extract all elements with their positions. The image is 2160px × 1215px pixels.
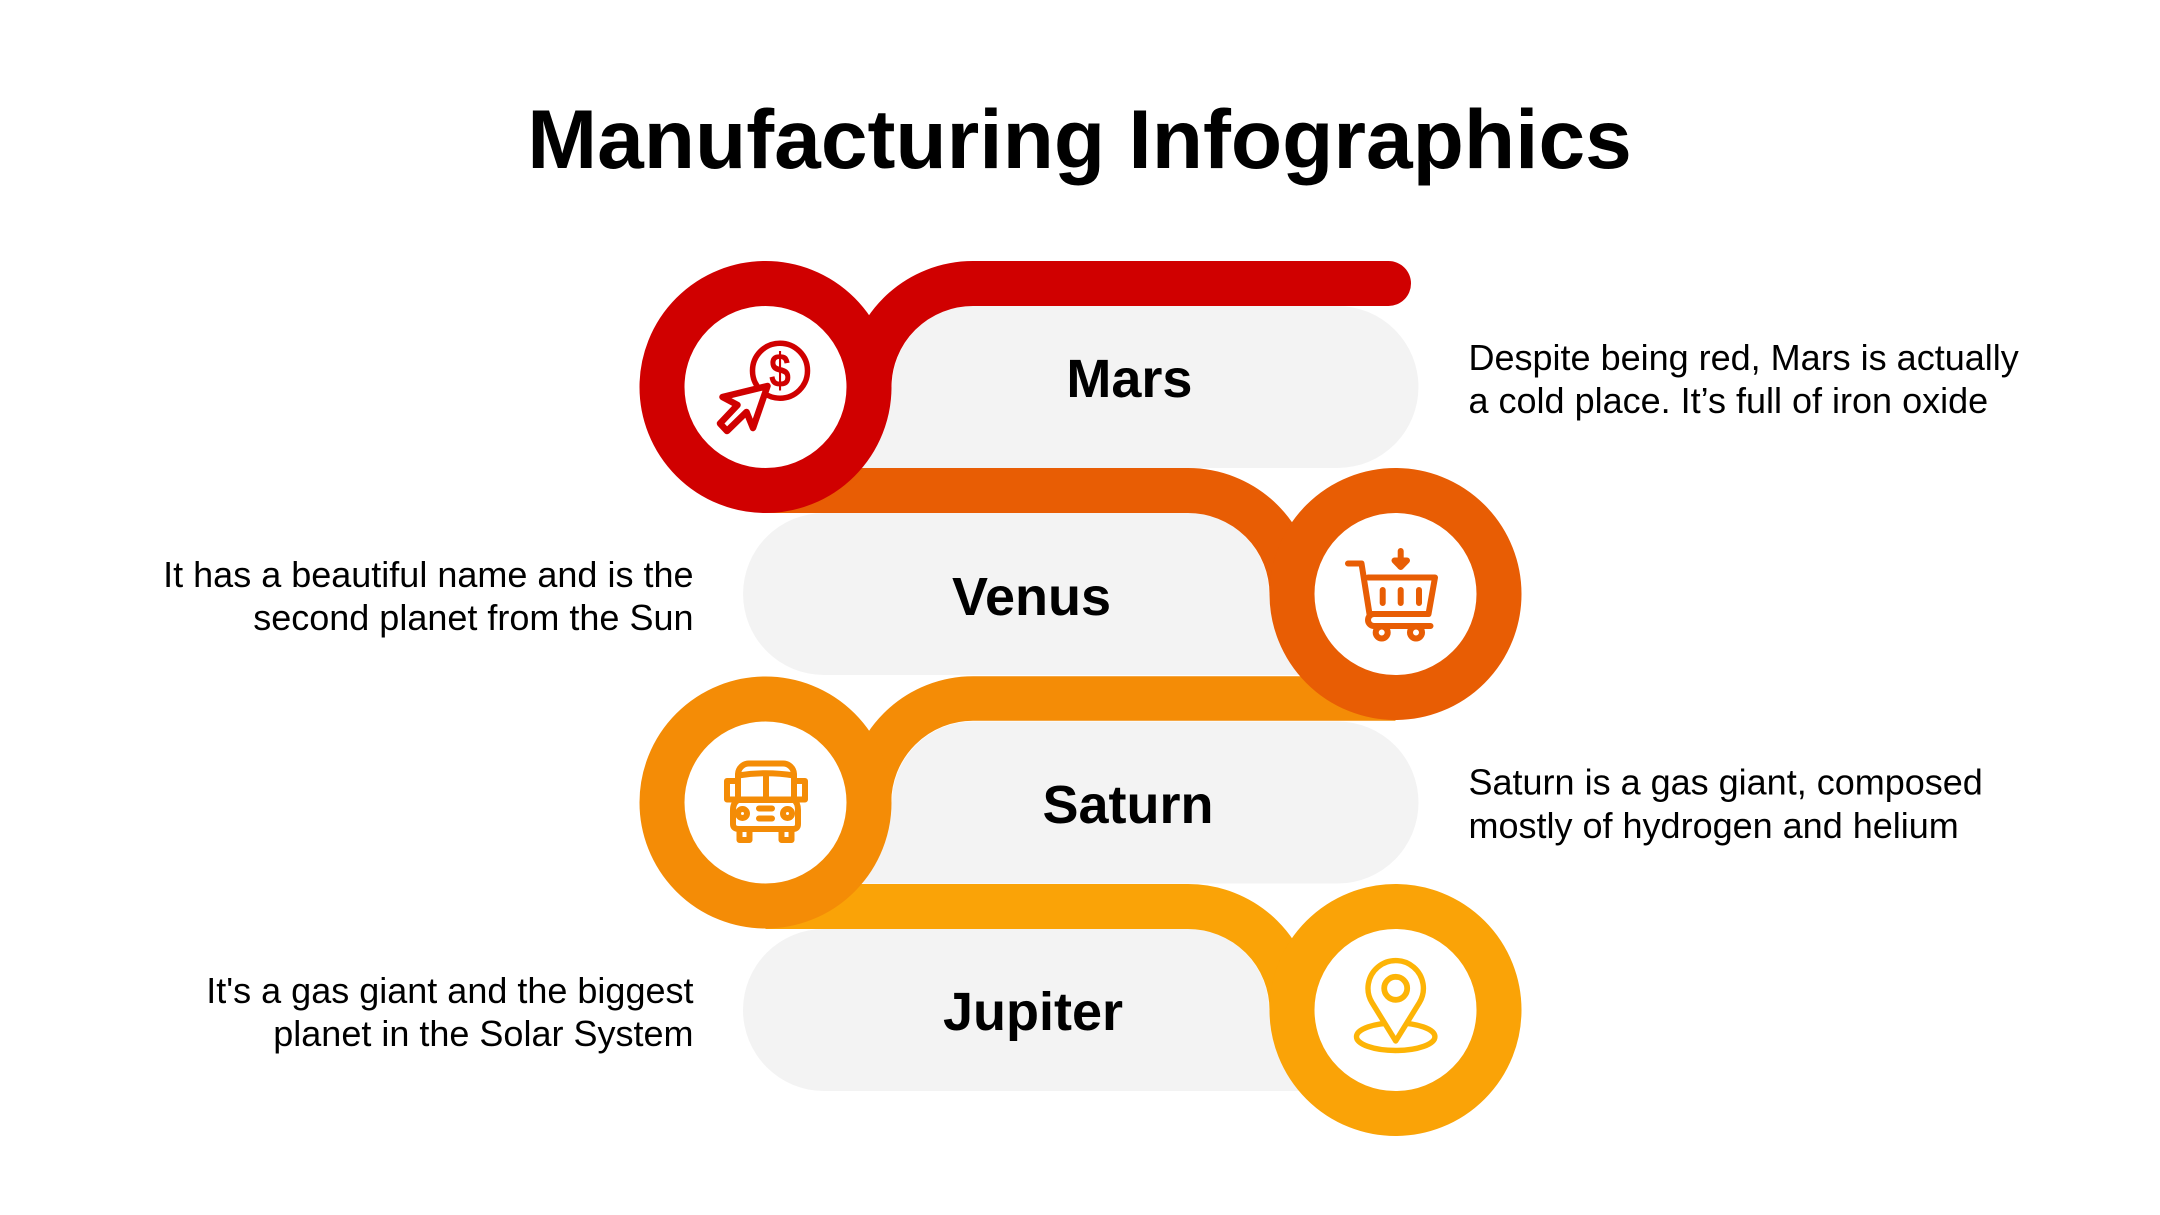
Venus label: Venus <box>952 567 1111 627</box>
panel: Mars <box>662 284 2019 490</box>
Jupiter description: planet in the Solar System <box>273 1013 694 1054</box>
Jupiter description: It's a gas giant and the biggest <box>206 970 694 1011</box>
Venus description: second planet from the Sun <box>253 597 694 638</box>
Saturn connector ribbon <box>869 698 1396 802</box>
Saturn description: Saturn is a gas giant, composed <box>1468 762 1983 802</box>
Mars description: a cold place. It’s full of iron oxide <box>1468 380 1988 421</box>
Venus ring <box>1292 490 1499 698</box>
panel: Saturn <box>662 698 1983 906</box>
panel: Venus <box>163 490 1499 698</box>
Venus connector ribbon <box>766 490 1292 594</box>
Mars label pill <box>765 306 1418 468</box>
Jupiter label: Jupiter <box>943 982 1123 1042</box>
icon: cursor clicking dollar coin <box>720 343 808 431</box>
Jupiter label pill <box>743 929 1396 1091</box>
icon: shopping cart <box>1348 551 1435 638</box>
panel: Jupiter <box>206 906 1499 1114</box>
Mars connector ribbon <box>869 284 1388 387</box>
Jupiter ring <box>1292 906 1499 1114</box>
Saturn description: mostly of hydrogen and helium <box>1468 805 1959 846</box>
Saturn ring <box>662 699 869 906</box>
icon: map pin <box>1356 961 1435 1050</box>
icon: bus <box>727 764 805 840</box>
Mars label: Mars <box>1066 349 1192 409</box>
icon: cursor clicking dollar coin: $ <box>769 344 791 398</box>
Mars ring <box>662 284 869 490</box>
Mars description: Despite being red, Mars is actually <box>1468 337 2019 378</box>
title: Manufacturing Infographics <box>527 92 1632 186</box>
Venus description: It has a beautiful name and is the <box>163 554 694 595</box>
Jupiter connector ribbon <box>766 906 1292 1010</box>
Venus label pill <box>743 513 1396 675</box>
Saturn label: Saturn <box>1042 775 1214 835</box>
Saturn label pill <box>765 722 1418 884</box>
